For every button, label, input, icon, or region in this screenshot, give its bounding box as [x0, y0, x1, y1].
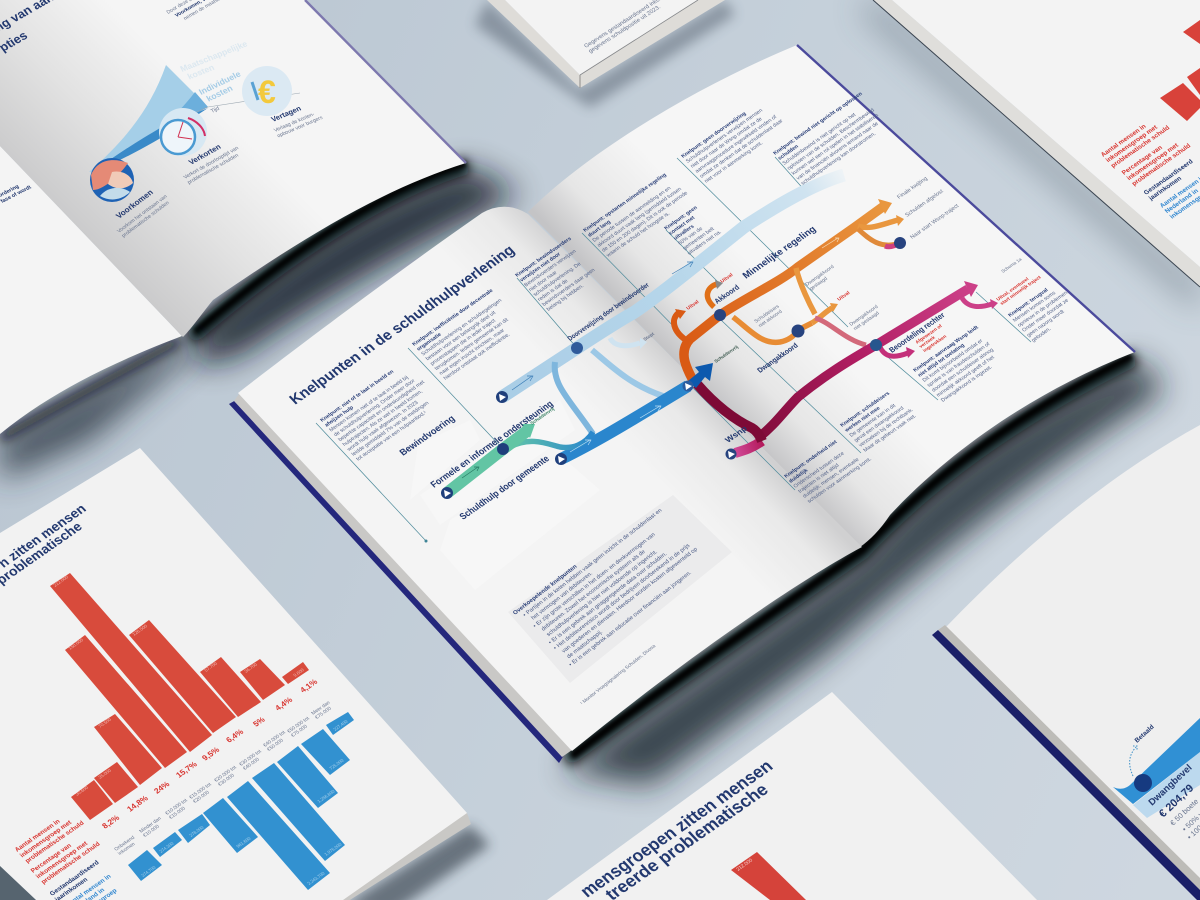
text: knelpunt hulp: Knelpunt: niet of te laat in beeld en [319, 369, 395, 423]
text: knelpunt hulp: tot acceptatie van een hulpaanbod.¹ [355, 410, 428, 462]
percentage row: 14,8% [125, 794, 150, 813]
chart legend labels: inkomensgroep met [1126, 142, 1181, 182]
text: knelpunt decentraal: hierdoor ontstaat ook inefficiëntie. [443, 332, 511, 381]
text: knelpunt terugval: Mensen komen soms [1012, 290, 1057, 323]
river labels: Finale kwijting [896, 176, 929, 200]
option labels: Verlaag de kosten- [273, 112, 316, 134]
overkoepelende text: debiteuren. Zowel het economische systeem als de [541, 549, 647, 632]
option labels: Vertagen [269, 104, 303, 124]
row labels: Aantal mensen in [14, 818, 62, 853]
left page note: fase of wordt [0, 185, 33, 205]
labels: Betaald [1134, 724, 1156, 744]
text: knelpunt wsnp: Dwangakkoord is ingezet. [940, 365, 994, 403]
text: knelpunt onderscheid: schulden voor aanmerking komt. [806, 457, 873, 504]
funnel chart: kosten [204, 83, 234, 103]
river labels: geslaagd [808, 276, 829, 292]
labels [1134, 724, 1200, 841]
blue bar values [140, 719, 349, 886]
income labels: €20.000 tot [213, 764, 238, 783]
panel: overkoepelende knelpunten [508, 495, 732, 683]
income labels: €20.000 [192, 790, 211, 805]
text: knelpunt doorverwijzing: niet door naar de Wsnp omdat ze de [690, 116, 764, 169]
option labels: Verkorten [187, 142, 223, 167]
text: knelpunt onderscheid: Knelpunt: onderheid niet [783, 439, 839, 479]
flow: bewindvoering light blue [502, 175, 844, 434]
river labels [398, 176, 1043, 522]
blue bar values: 2.243.700 [306, 871, 326, 886]
icon: euro: € [258, 74, 276, 110]
text: knelpunt bewind: schulden [777, 144, 800, 161]
option labels [114, 104, 324, 239]
blue bar values: 1.975.000 [323, 842, 343, 857]
flow: wsnp magenta [697, 281, 998, 453]
river labels: niet akkoord [757, 309, 784, 329]
text: knelpunt opstarten: waarin de schuld het hoogste is. [605, 211, 671, 258]
row labels: inkomensgroep met [19, 819, 74, 859]
red bar values: 35.000 [97, 768, 113, 780]
overkoepelende text: • [532, 624, 538, 629]
text: knelpunt onderscheid: trajecten is niet altijd [797, 463, 841, 494]
chart legend labels: Nederland in [1164, 188, 1200, 215]
river labels: Doorverwijzing door bewindvoerder [567, 282, 651, 342]
text: knelpunt bewindvoerders: belang bij hebben. [546, 283, 585, 312]
brochure: top left spread [0, 0, 466, 434]
brochure: top right [873, 0, 1200, 287]
text: knelpunt schuldeisers: geval een dwangakkoord [853, 406, 905, 443]
income labels: €50.000 tot [286, 715, 311, 734]
text: knelpunt bewindvoerders: niet door naar [528, 270, 559, 293]
text: knelpunt wsnp: Knelpunt: aanvraag Wsnp leidt [912, 325, 980, 373]
labels: Dwangbevel [1147, 762, 1194, 808]
row labels: problematische schuld [24, 820, 86, 865]
text: knelpunt onderscheid: Onderscheid tussen deze [793, 451, 846, 489]
income labels: €40.000 [242, 757, 261, 772]
red bar values: 36.700 [243, 662, 259, 674]
text: knelpunt bewind: oplossen van de schulden. Beschermbewind [786, 107, 876, 171]
brochure: top center: gegevens schuldpositie uit 2023. [588, 4, 662, 55]
red bar values: 126.500 [131, 623, 149, 637]
river labels: Schulden afgelost [904, 189, 945, 218]
row labels: Percentage van [30, 842, 73, 874]
income labels: €75.000 [290, 724, 309, 739]
income labels: €50.000 [266, 738, 285, 753]
overkoepelende text: het vermogen van debiteuren. [530, 571, 595, 621]
percentage row: 4,4% [273, 695, 294, 712]
guide lines [316, 157, 1031, 542]
funnel chart [89, 39, 300, 172]
right page [528, 45, 1135, 547]
option labels: Voorkom het ontstaan van [116, 194, 169, 234]
income labels: €30.000 tot [238, 748, 263, 767]
option labels: Verkort de doorlooptijd van [183, 145, 240, 181]
percentage row: 4,1% [298, 677, 319, 694]
blue bar values: 725.000 [328, 758, 345, 771]
overkoepelende text: van goederen en diensten. Hierdoor worden kosten afgewenteld op [561, 547, 699, 654]
red bar [731, 852, 806, 900]
text: knelpunt bewind: kunnen wel een rol spelen in het stabiliseren [791, 113, 880, 176]
text: knelpunt decentraal: processtappen die in ieder traject [429, 318, 498, 367]
percentage row: 5% [251, 715, 267, 728]
overkoepelende text: • [548, 640, 553, 646]
option labels: opbouw voor burgers [276, 115, 324, 139]
overkoepelende text: • [522, 613, 528, 618]
purple cover edge [797, 45, 1135, 352]
text: knelpunt wsnp: Dit komt bijvoorbeeld omdat er [922, 338, 985, 383]
chart legend labels: Aantal mensen in [1100, 123, 1148, 158]
funnel chart: Tijd [210, 106, 221, 115]
brochure: bottom center chart page [547, 692, 1037, 900]
text: knelpunt wsnp: sprake is van fraudeschulden of [926, 341, 992, 388]
text: knelpunt wsnp: doordat een schuldeiser alsnog [931, 347, 995, 393]
labels: € 50 boete [1168, 797, 1200, 827]
chart legend labels: jaarinkomen [1147, 175, 1183, 202]
text: knelpunt bewindvoerders: Bewindvoerders verwijzen [523, 249, 578, 288]
overkoepelende text: schuldhulpverlening is hier niet voldoende op ingericht. [546, 549, 659, 638]
chart legend labels: problematische schuld [1131, 143, 1192, 187]
river labels: Schuldeisers [753, 304, 781, 324]
row labels [14, 809, 123, 900]
text: knelpunt onderscheid: duidelijk [788, 468, 810, 484]
brochure: bar chart page bottom left [0, 448, 471, 900]
text: knelpunt doorverwijzing: Knelpunt: geen doorverwijzing [680, 111, 748, 159]
text: knelpunt bewind: van de financiën alvorens iemand naar de [795, 121, 880, 181]
text: knelpunt bewindvoerders: schuldhulpverlening. De [532, 261, 583, 298]
text: knelpunt opstarten: De periode tussen de aanmelding en en [592, 186, 672, 243]
text: knelpunt hulp: beperkte capaciteit en ondeskundigheid met [337, 379, 426, 443]
text: knelpunt onderscheid: duidelijk; mensen, eventuele [802, 457, 861, 499]
river labels: Dwangakkoord [755, 341, 800, 374]
overkoepelende text: Er is een gebrek aan geaggregeerde data over schulden. [551, 551, 669, 643]
percentage row [100, 677, 319, 830]
river labels: Uitval [836, 290, 852, 302]
river labels: Uitval [685, 299, 701, 311]
text: knelpunt terugval: Onder meer doordat ze [1021, 298, 1070, 333]
chart legend labels: Percentage van [1121, 144, 1164, 176]
income labels: €10.000 [142, 824, 161, 839]
text: knelpunt bewindvoerders: reden is dat de [537, 278, 570, 303]
percentage row: 15,7% [174, 760, 199, 779]
icon: euro [242, 66, 292, 116]
icon: blue arrow [688, 363, 713, 388]
footnote: ¹ Monitor Vroegsignalering Schulden, Divosa [579, 643, 657, 706]
main spread brochure [229, 45, 1135, 763]
river labels: start minnelijk traject [999, 275, 1043, 307]
text: knelpunt contact: gemeenten belt [682, 226, 716, 251]
red bars [1160, 20, 1200, 121]
text: knelpunt doorverwijzing: omdat ze denken dat de schuldenlast daar [699, 118, 785, 179]
income labels: €10.000 tot [164, 797, 189, 816]
income labels: €75.000 [314, 706, 333, 721]
text: knelpunt hulp: leidde gemiddeld 7% van de meldingen [351, 400, 430, 457]
text: knelpunt bewind: Knelpunt: bewind niet gericht op oplossen [772, 91, 864, 156]
title: mensgroepen zitten mensen [576, 756, 777, 900]
text: knelpunt wsnp: minnelijk akkoord geeft of het [935, 355, 996, 398]
right page [0, 0, 466, 337]
text: knelpunt opstarten: akkoord duurt vaak lang (gemiddeld tussen [596, 186, 683, 248]
option labels: problematische schulden [186, 153, 240, 186]
red bar values: 70.500 [97, 717, 113, 729]
option labels: Voorkomen [114, 188, 155, 220]
river labels: Beoordeling rechter [887, 311, 947, 354]
overkoepelende text: de maatschappij. [566, 629, 604, 660]
text: knelpunt terugval: Knelpunt: terugval [1007, 287, 1050, 318]
text: knelpunt hulp: Mensen komen niet of te laat in beeld bij [328, 375, 410, 433]
red bar values [52, 574, 305, 797]
red bar values: 30.600 [74, 785, 90, 797]
funnel chart: kosten [186, 62, 216, 81]
text: knelpunt doorverwijzing: aanvraagprocedure ingewikkeld vinden of [694, 114, 779, 174]
row labels: Gestandaardiseerd [49, 859, 101, 897]
river labels: Schema 1a [1000, 257, 1023, 274]
blue bar values: 374.700 [140, 865, 157, 878]
income labels: €15.000 tot [188, 781, 213, 800]
blue bar values: 274.300 [158, 841, 175, 854]
text: knelpunt schuldeisers: De gemeente kan in dit [849, 403, 898, 438]
income labels: Meer dan [310, 700, 332, 716]
text: knelpunt opstarten: duurt lang [587, 219, 612, 238]
river labels: Schuldenvrij [529, 406, 555, 426]
text: knelpunt schuldeisers: verzoeken bij de rechtbank. [858, 407, 915, 448]
red bar values: 150.000 [67, 637, 85, 651]
red bars: people with problem debt [50, 573, 309, 820]
funnel chart: Individuele [197, 69, 243, 97]
text: knelpunt hulp: de schuldhulpverlening. Onder meer door [333, 378, 417, 438]
text: knelpunt contact: uitvallers niet na. [686, 229, 723, 256]
text: knelpunt bewindvoerders: Knelpunt: bewindvoerders [514, 236, 573, 278]
text: knelpunt decentraal: terugkomen. Iedere gemeente kan dit [434, 317, 510, 372]
blue bars: people in the Netherlands [128, 712, 354, 890]
river labels: Stopt [642, 331, 656, 342]
river labels: niet geslaagd [852, 310, 881, 332]
river labels: Formele en informele ondersteuning [429, 399, 556, 490]
blue bar values: 278.000 [188, 825, 205, 838]
text: knelpunt decentraal: bestaan voor een belangrijk deel uit [425, 310, 498, 362]
river labels: Schuldhulp door gemeente [458, 454, 552, 522]
cover edge [229, 400, 566, 763]
overkoepelende text: Er is een gebrek aan educatie over financiën aan jongeren. [571, 570, 693, 665]
chart legend labels: inkomensgroep met [1105, 124, 1160, 164]
brochure: bottom right [932, 425, 1200, 900]
income labels: Onbekend [113, 835, 136, 852]
text: knelpunt decentraal: Schuldhulpverlening en schuldregelingen [420, 298, 503, 357]
text: knelpunt terugval: geboden. [1030, 326, 1053, 343]
title: Knelpunten in de schuldhulpverlening [286, 242, 518, 408]
text: knelpunt opstarten: Knelpunt: opstarten minnelijke regeling [582, 172, 668, 233]
river labels: Naar start Wsnp-traject [909, 203, 961, 240]
text: knelpunt terugval: geen nazorg wordt [1026, 309, 1066, 338]
income labels: inkomen [117, 841, 137, 857]
percentage row: 24% [152, 780, 171, 795]
text: knelpunt schuldeisers: Maar dit gebeurt vaak niet. [862, 413, 918, 453]
text: knelpunt contact: contact met [668, 215, 696, 236]
river labels: Uitval, eventueel [995, 277, 1030, 302]
percentage row: 6,4% [224, 727, 245, 744]
text: knelpunt decentraal: naar eigen inzicht inrichten, maar [438, 328, 506, 377]
river nodes [441, 309, 882, 499]
percentage row: 9,5% [200, 745, 221, 762]
left page [0, 146, 182, 434]
flow: formele ondersteuning green [447, 424, 535, 493]
text: knelpunt doorverwijzing: niet voor in aanmerking komt. [703, 141, 764, 184]
text: knelpunt contact: Knelpunt: geen [663, 205, 699, 231]
text: knelpunt schuldeisers: werken niet mee [843, 406, 882, 434]
brochure: bottom center chart page: 212.000 [735, 858, 754, 872]
overkoepelende text: Partijen in de keten hebben vaak geen inzicht in de schuldenlast en [525, 508, 664, 616]
overkoepelende text: Overkoepelende knelpunten [512, 564, 579, 616]
text: knelpunt hulp: wordt hulp vaak afgewezen. In 2023 [346, 400, 420, 453]
income labels: €40.000 tot [262, 729, 287, 748]
purple cover edge [305, 0, 466, 163]
text: knelpunt decentraal: Knelpunt: inefficiëntie door decentrale [411, 288, 495, 347]
text: knelpunt wsnp: niet altijd tot toelating [917, 343, 966, 378]
row labels: problematische schuld [40, 841, 102, 886]
river labels: Akkoord [712, 283, 742, 305]
river labels: Uitval [719, 272, 735, 284]
river labels: Dwangakkoord [848, 304, 880, 327]
text: knelpunt terugval: opnieuw in de problemen. [1017, 290, 1070, 328]
river labels: Afgewezen of [914, 323, 944, 345]
chart legend labels: Gestandaardiseerd [1143, 158, 1195, 196]
blue bar values: 227.400 [332, 719, 349, 732]
income labels: €30.000 [217, 773, 236, 788]
row labels: inkomensgroep met [35, 840, 90, 880]
chart legend labels [1100, 114, 1200, 220]
funnel chart: Maatschappelijke [178, 39, 249, 74]
red bar values: 57.700 [203, 661, 219, 673]
text: knelpunt hulp: afwijzen hulp [324, 405, 356, 428]
text: knelpunt bewindvoerders: verwijzen niet door [519, 252, 562, 283]
brochure: top center [487, 0, 725, 88]
overkoepelende text: • [568, 662, 574, 668]
paper stack [234, 394, 572, 757]
icon: voorkomen [90, 158, 134, 202]
option labels: problematische schulden [121, 200, 171, 239]
river labels: Schuldenvrij [713, 344, 739, 364]
flow: schuldhulp door gemeente blue [510, 386, 688, 459]
pale label panels [410, 400, 600, 590]
river labels: Dwangakkoord [804, 264, 836, 287]
text: knelpunt bewindvoerders: bewindvoerders daar geen [541, 267, 597, 308]
river labels: Bewindvoering [398, 414, 458, 458]
overkoepelende text: Er zijn grote verschillen in het doen- en denkvermogen van [535, 532, 657, 627]
overkoepelende text: • [553, 646, 558, 651]
red bar values: 9.600 [292, 667, 305, 678]
text: knelpunt decentraal: organisatie [416, 332, 443, 352]
overkoepelende text: Het debiteurenrisico wordt door bedrijven doorberekend in de prijs [556, 543, 691, 649]
river labels: Minnelijke regeling [741, 224, 819, 281]
text: knelpunt opstarten: de 150 en 200 dagen). Dit is ook de periode [601, 190, 689, 253]
left page [238, 207, 862, 751]
text: knelpunt bewind: Schuldenbewind is niet gericht op het [782, 112, 858, 166]
labels: € 204,79 [1157, 782, 1196, 820]
text: knelpunt contact: 60% van de [677, 226, 704, 246]
river labels: Wsnp [723, 424, 749, 444]
icon: clock [159, 108, 207, 156]
income labels: €15.000 [168, 806, 187, 821]
text: knelpunt hulp: hulptrajecten. Als ze wel in beeld komen, [342, 389, 424, 448]
text: knelpunt contact: uitvallers [673, 224, 696, 241]
river labels: ingetrokken [922, 334, 948, 354]
flow: minnelijke regeling orange [674, 199, 906, 384]
income labels: Minder dan [138, 816, 163, 834]
percentage row: 8,2% [100, 813, 121, 830]
blue bar values: 961.600 [235, 836, 252, 849]
flow band [1113, 718, 1200, 818]
chart legend labels: problematische schuld [1110, 125, 1171, 169]
income labels [113, 700, 336, 857]
text: knelpunt schuldeisers: Knelpunt: schuldeisers [839, 391, 891, 428]
text: knelpunt bewind: schuldhulpverlening kan doorstromen. [800, 131, 877, 186]
clipped title [0, 0, 69, 54]
blue bar values: 1.256.800 [316, 789, 336, 804]
river labels: verzoek [918, 335, 937, 350]
text: knelpunt doorverwijzing: Schuldhulpverleners verwijzen mensen [685, 108, 764, 164]
red bar values: 212.000 [52, 574, 70, 588]
